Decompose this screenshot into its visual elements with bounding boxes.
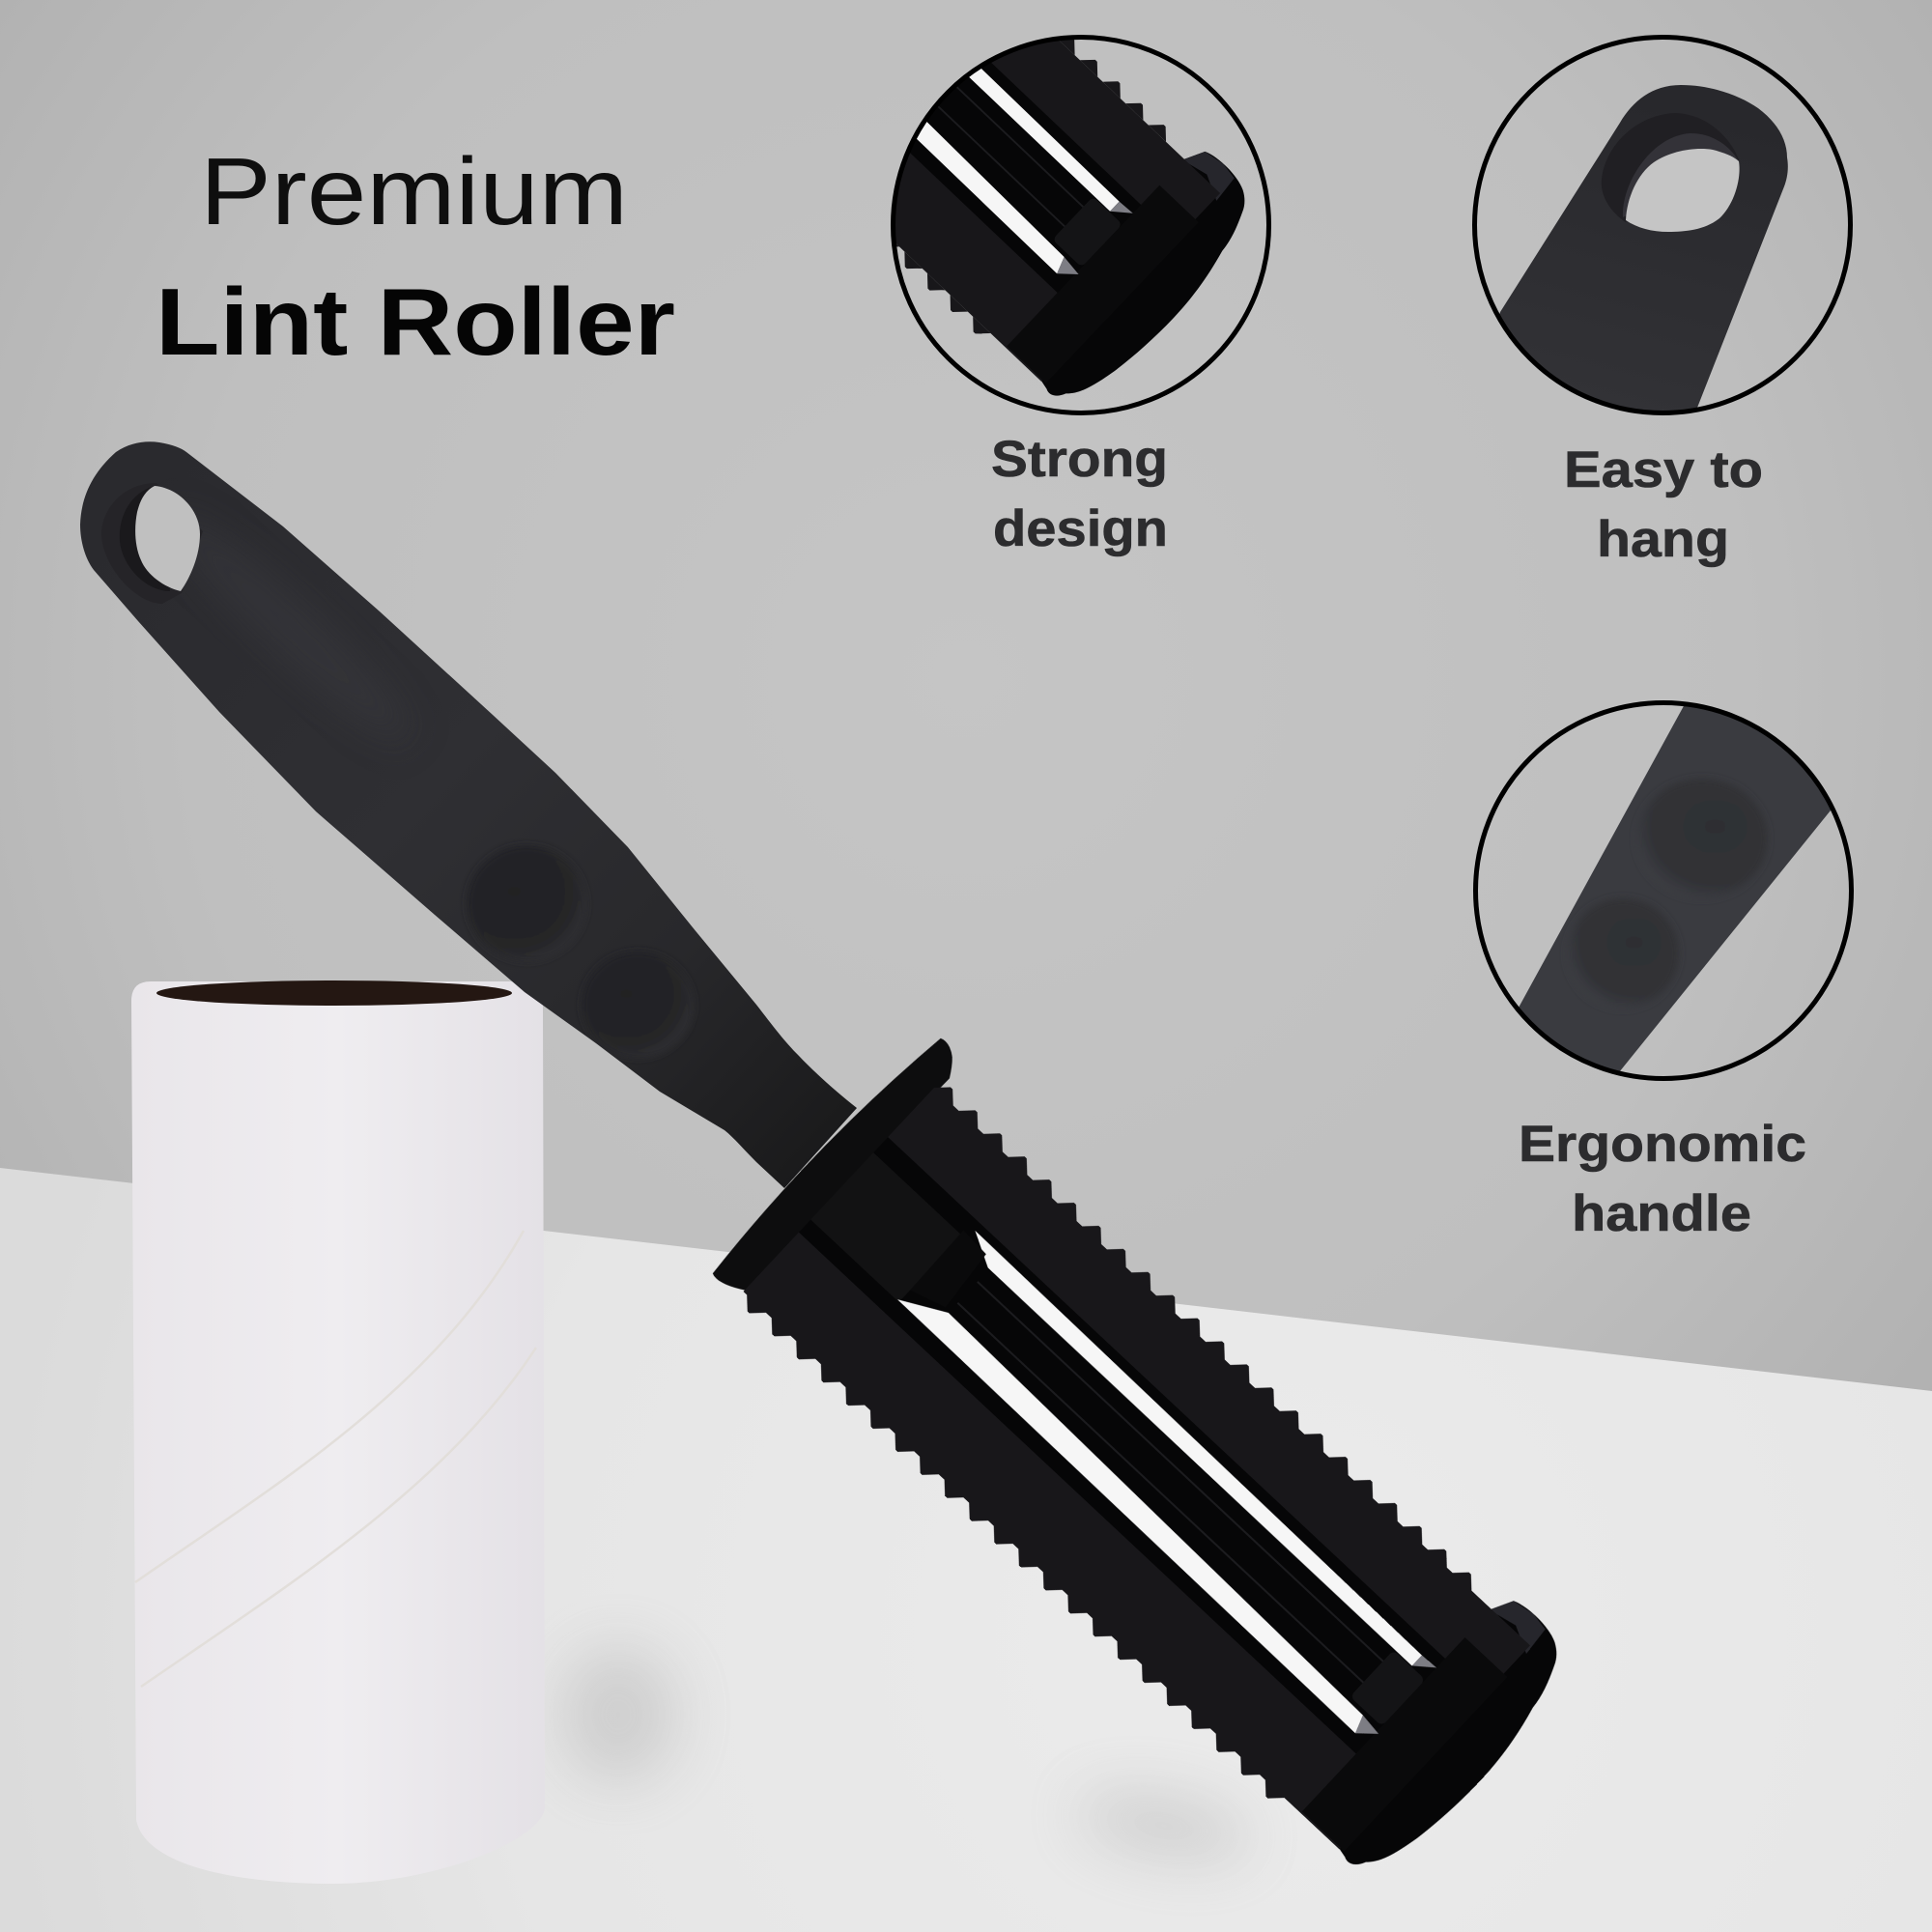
white gap lower corner bbox=[1350, 1716, 1380, 1746]
serrated top edge bbox=[934, 1079, 1485, 1596]
label: Strong design bbox=[991, 431, 1168, 557]
far end block bbox=[1350, 1650, 1426, 1726]
white gap upper corner bbox=[1412, 1655, 1436, 1679]
label: Strong design: Strong bbox=[991, 431, 1168, 488]
table surface bbox=[0, 1168, 1932, 1932]
label: Strong design: design bbox=[993, 500, 1168, 557]
title bbox=[156, 138, 675, 375]
roll inner opening bbox=[156, 980, 512, 1006]
shaft cap bbox=[909, 1231, 992, 1316]
roller body bbox=[744, 1088, 1530, 1849]
circle: strong design bbox=[891, 35, 1271, 415]
end flange top face bbox=[1485, 1590, 1549, 1654]
hanging hole bbox=[101, 483, 203, 604]
label: Ergonomic handle: handle bbox=[1572, 1185, 1751, 1242]
lint roller handle bbox=[80, 441, 857, 1188]
handle shading and dimples bbox=[150, 495, 694, 1058]
label: Easy to hang bbox=[1564, 441, 1763, 568]
title line: Lint Roller: Lint Roller bbox=[156, 269, 675, 375]
white gap lower bbox=[895, 1281, 1376, 1733]
circle: easy to hang bbox=[1468, 37, 1851, 435]
serrated bottom edge bbox=[739, 1294, 1290, 1811]
inner frame rails bbox=[799, 1137, 1463, 1771]
shadow on table bbox=[560, 1647, 1255, 1871]
circle: ergonomic handle bbox=[1476, 676, 1855, 1082]
central channel bbox=[957, 1282, 1383, 1683]
end flange bbox=[1297, 1590, 1588, 1889]
white gap upper bbox=[962, 1231, 1425, 1665]
shaft bbox=[810, 1152, 961, 1302]
label: Easy to hang: Easy to bbox=[1564, 441, 1763, 498]
label: Easy to hang: hang bbox=[1597, 511, 1729, 568]
label: Ergonomic handle: Ergonomic bbox=[1519, 1116, 1806, 1173]
title line: Premium: Premium bbox=[200, 138, 628, 244]
refill roll bbox=[131, 980, 545, 1884]
near flange bbox=[708, 1030, 966, 1301]
label: Ergonomic handle bbox=[1519, 1116, 1806, 1242]
roller head bbox=[706, 1030, 1600, 1896]
end collar bbox=[1302, 1637, 1507, 1851]
